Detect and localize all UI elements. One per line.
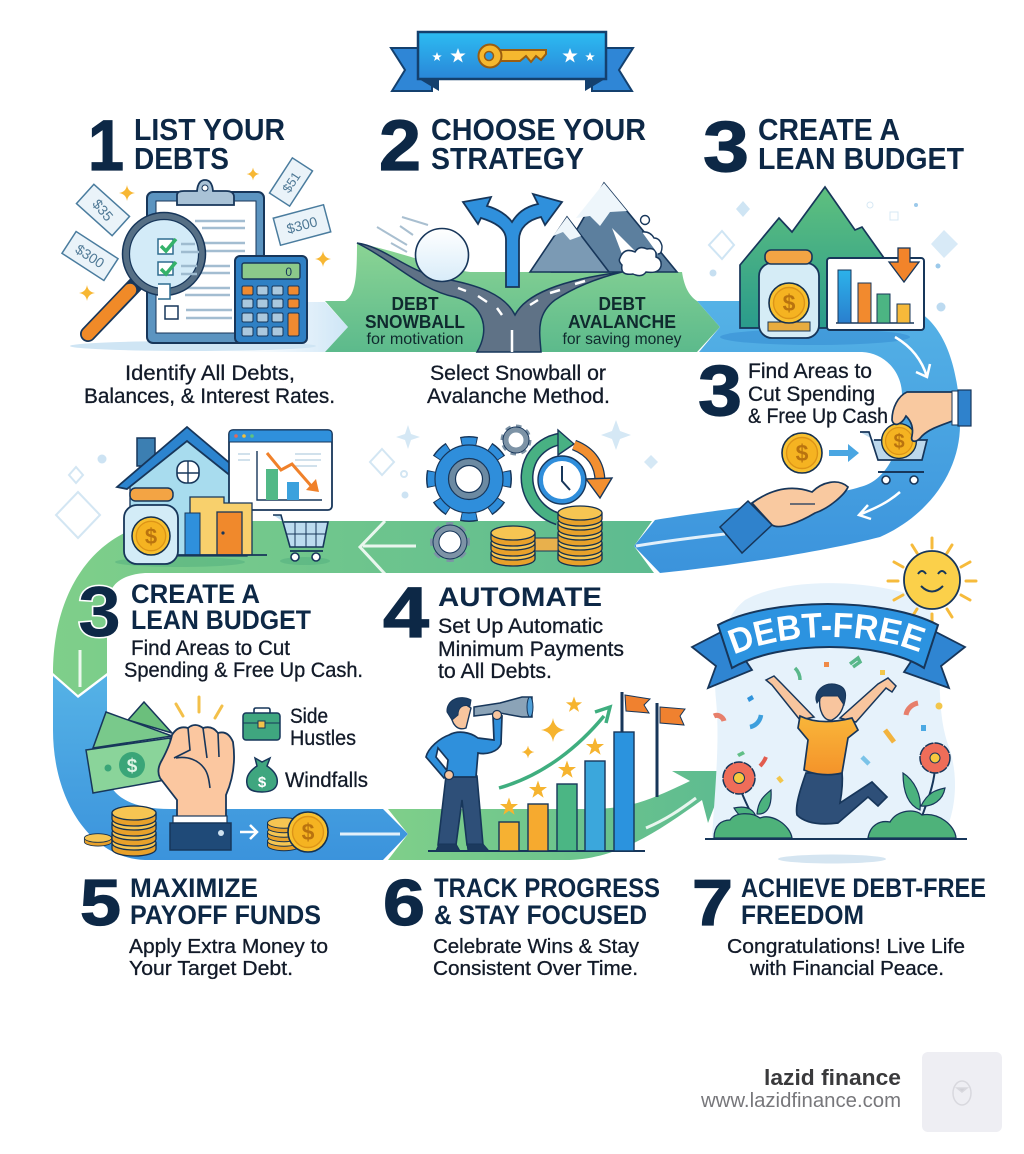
icon: big gear — [433, 443, 505, 515]
icon: left flower — [723, 762, 771, 838]
icon: coin stack left — [84, 806, 156, 856]
banner body — [418, 32, 606, 79]
icon: right flower — [903, 743, 950, 838]
step 3: create a lean budget (top) — [698, 108, 971, 553]
icon: logo mark — [953, 1081, 971, 1105]
brand url: www.lazidfinance.com — [700, 1090, 901, 1112]
heading: TRACK PROGRESS — [434, 873, 660, 903]
description: Find Areas to Cut — [131, 637, 290, 660]
step 3 illustration row: home budget — [56, 420, 658, 567]
icon: top gear — [503, 427, 529, 453]
icon: hand dropping coin — [892, 390, 971, 441]
stars — [432, 48, 595, 62]
number 1: 1 — [88, 107, 124, 186]
icon: flying bills: $300 — [73, 241, 108, 271]
step 6: track progress: Consistent Over Time. — [433, 958, 638, 980]
icon: loose coin: $ — [796, 440, 809, 466]
left step 3: create a lean budget: LEAN BUDGET — [131, 605, 311, 635]
ribbon: green rising arrow — [388, 771, 728, 860]
heading: AUTOMATE — [438, 582, 602, 612]
label: debt avalanche: for saving money — [562, 331, 682, 348]
ribbon: green strategy band — [325, 243, 720, 352]
description: Set Up Automatic — [438, 615, 603, 638]
icon: bar chart — [499, 732, 634, 851]
icon: shopping cart — [860, 432, 927, 484]
icon: bushes — [714, 811, 956, 838]
description: Congratulations! Live Life — [727, 936, 965, 958]
icon: small gear — [433, 525, 467, 559]
step 6 illustration: man with telescope and rising bars — [426, 692, 685, 851]
winding roadmap ribbon — [53, 243, 960, 860]
description: Select Snowball or — [430, 362, 606, 385]
number 2: 2 — [379, 107, 421, 186]
icon: cash bills: $ — [127, 756, 138, 777]
banner tails — [391, 48, 633, 91]
brand footer — [700, 1052, 1002, 1132]
icon: man with telescope — [426, 697, 533, 851]
brand name: lazid finance — [764, 1065, 901, 1090]
number 5: 5 — [80, 866, 121, 939]
heading: ACHIEVE DEBT-FREE — [741, 873, 986, 903]
icon: briefcase — [243, 708, 280, 740]
number 6: 6 — [383, 866, 425, 939]
step 4: automate: to All Debts. — [438, 660, 552, 683]
description: Find Areas to — [748, 360, 872, 383]
step 7: achieve debt-free freedom — [692, 866, 986, 980]
ground line — [428, 850, 645, 852]
icon: magnifier — [88, 212, 206, 334]
curved white arrow — [895, 337, 930, 377]
step 1: list your debts — [62, 107, 335, 408]
icon: flags — [622, 692, 685, 797]
step 7: achieve debt-free freedom: FREEDOM — [741, 900, 864, 930]
floor shadow — [778, 854, 886, 864]
icon: impact rays — [176, 697, 222, 718]
ribbon: pale start arrow — [225, 302, 348, 352]
icon: coin jar — [124, 488, 178, 564]
icon: money bag: $ — [258, 774, 267, 791]
pale backdrop — [712, 583, 955, 838]
icon: open hand — [720, 482, 848, 553]
step 7 illustration: debt-free celebration — [690, 536, 978, 864]
icon: coin stack right: $ — [302, 819, 315, 845]
arrow — [240, 825, 257, 839]
fork arrow — [463, 194, 562, 287]
ribbon body — [718, 604, 938, 668]
heading: CREATE A — [758, 112, 900, 147]
heading: CREATE A — [131, 579, 260, 609]
icon: folders and door — [177, 497, 267, 555]
top banner with key — [391, 32, 633, 91]
icon: cash bills — [86, 702, 176, 793]
label: debt snowball — [365, 294, 465, 348]
step 2: choose your strategy: STRATEGY — [431, 141, 584, 176]
label: debt avalanche — [562, 294, 682, 348]
icon: coin stack right — [268, 812, 328, 852]
number 3: 3 — [78, 573, 121, 652]
curved white arrow — [859, 492, 900, 519]
step 6: track progress — [383, 866, 660, 980]
confetti — [714, 658, 942, 782]
icon: calculator — [235, 256, 307, 343]
icon: flying bills: $35 — [89, 196, 117, 224]
icon: coin — [882, 424, 916, 458]
icon: key — [478, 44, 546, 68]
mountain — [740, 187, 884, 328]
step 3: create a lean budget (top): & Free Up Cash — [748, 405, 888, 428]
label: debt-free: DEBT-FREE — [728, 612, 926, 654]
mountains with avalanche — [530, 183, 677, 276]
label: windfalls: Windfalls — [285, 769, 368, 792]
heading: MAXIMIZE — [130, 873, 258, 903]
label: debt snowball: SNOWBALL — [365, 312, 465, 332]
ribbon: white chevrons — [80, 521, 725, 834]
icon: coin jar — [759, 250, 819, 338]
description: Apply Extra Money to — [129, 936, 328, 958]
arrow: coin to cart — [829, 444, 859, 462]
label: side hustles: Hustles — [290, 727, 356, 750]
icon: coin stacks — [491, 506, 602, 566]
step 3: create a lean budget (top): Cut Spending — [748, 383, 875, 406]
sparkles — [79, 168, 331, 301]
icon: smiling sun — [888, 538, 976, 622]
step 3: create a lean budget (top): LEAN BUDGET — [758, 141, 964, 176]
label: side hustles: Side — [290, 705, 328, 728]
icon: shopping cart — [273, 515, 330, 565]
step 6: track progress: & STAY FOCUSED — [434, 900, 647, 930]
icon: coin jar: $ — [145, 524, 157, 549]
left step 3: create a lean budget: Spending & Free Up Cash. — [124, 659, 363, 682]
heading: CHOOSE YOUR — [431, 112, 646, 147]
floor shadow — [70, 341, 316, 351]
number 3: 3 — [703, 108, 749, 187]
road fork — [357, 243, 622, 352]
description: Celebrate Wins & Stay — [433, 936, 639, 958]
icon: clock — [538, 456, 586, 504]
logo box — [922, 1052, 1002, 1132]
icon: browser chart — [229, 430, 332, 510]
icon: coin: $ — [893, 431, 905, 453]
description: Identify All Debts, — [125, 362, 295, 385]
icon: growth arrow — [499, 707, 610, 788]
ribbon: green left curve — [53, 521, 654, 695]
step 1: list your debts: DEBTS — [134, 141, 229, 176]
snowball with speed lines — [377, 217, 468, 282]
heading: LIST YOUR — [134, 112, 285, 147]
step 5: maximize payoff funds: Your Target Debt. — [129, 958, 293, 980]
icon: flying bills: $51 — [279, 169, 304, 195]
label: debt avalanche: DEBT — [598, 294, 646, 314]
icon: shrinking bar chart — [827, 248, 924, 330]
ground line — [705, 838, 967, 840]
left step 3: create a lean budget — [78, 573, 363, 682]
shadow — [115, 557, 245, 567]
icon: flying bills — [62, 158, 331, 281]
label: debt avalanche: AVALANCHE — [568, 312, 676, 332]
step 5 illustration: fist, bills, coins — [84, 697, 368, 856]
icon: raised fist — [158, 725, 234, 850]
label: debt snowball: DEBT — [392, 294, 439, 314]
step 2: choose your strategy — [357, 107, 682, 408]
label: debt snowball: for motivation — [366, 331, 464, 348]
ribbon: blue lower-left curve — [53, 676, 408, 860]
icon: house — [117, 427, 258, 556]
ribbon: blue right curve — [634, 301, 960, 573]
label: side hustles — [290, 705, 356, 750]
step 5: maximize payoff funds — [80, 866, 328, 980]
decorative diamonds — [56, 420, 658, 538]
icon: circular arrows — [527, 430, 612, 519]
step 7: achieve debt-free freedom: with Financial Peace. — [749, 958, 944, 980]
step 4 illustration: gears, clock, coins — [433, 427, 612, 566]
step 5: maximize payoff funds: PAYOFF FUNDS — [130, 900, 321, 930]
step 2: choose your strategy: Avalanche Method. — [427, 385, 610, 408]
icon: stars — [500, 696, 604, 815]
step 1: list your debts: Balances, & Interest Rates. — [84, 385, 335, 408]
debt-free ribbon — [690, 603, 967, 690]
icon: jumping person — [766, 676, 896, 824]
icon: calculator: 0 — [285, 265, 292, 279]
icon: coin jar: $ — [783, 290, 796, 316]
icon: clipboard — [147, 180, 264, 343]
number 3 (sub step): 3 — [698, 352, 742, 431]
icon: loose coin — [782, 433, 822, 473]
number 7: 7 — [692, 866, 733, 939]
icon: money bag — [247, 758, 277, 792]
step 4: automate — [383, 574, 624, 683]
ribbon tails — [692, 630, 965, 688]
number 4: 4 — [383, 574, 430, 653]
decorative diamonds — [709, 201, 958, 312]
step 4: automate: Minimum Payments — [438, 638, 624, 661]
icon: flying bills: $300 — [285, 213, 319, 237]
